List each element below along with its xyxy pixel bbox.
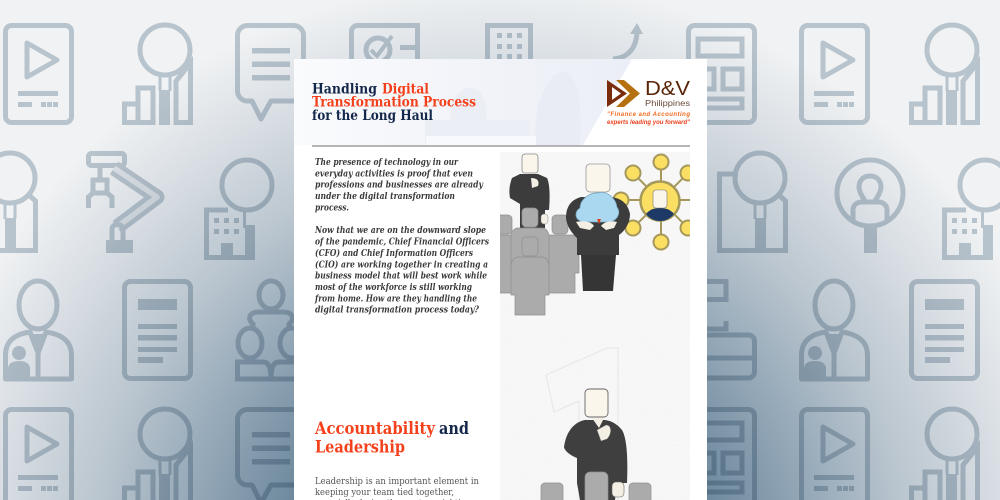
icon: person in magnifier — [837, 160, 903, 253]
intro text: from home. How are they handling the — [314, 294, 477, 304]
intro text: most of the workforce is still working — [315, 283, 472, 293]
intro text: professions and businesses are already — [315, 181, 484, 191]
icon: cash register — [688, 282, 754, 378]
icon: check document — [352, 26, 420, 83]
number one outline — [546, 348, 618, 500]
leadership body text: keeping your team tied together, — [315, 488, 454, 498]
intro text: of the pandemic, Chief Financial Officers — [315, 237, 489, 247]
man with hand on heart, front — [564, 389, 627, 500]
logo: D&V Philippines: D&V — [645, 78, 691, 100]
icon: magnifier chart bottom — [124, 409, 190, 500]
icon: magnifier chart — [124, 25, 190, 125]
illustration: leaders, team and digital network — [500, 154, 690, 500]
title: Transformation Process — [312, 95, 476, 111]
intro text: business model that will best work while — [315, 272, 487, 282]
logo: D&V Philippines: "Finance and Accounting — [607, 112, 690, 118]
icon: person in suit — [6, 281, 72, 379]
logo: D&V Philippines: experts leading you forward" — [607, 120, 690, 126]
intro text — [314, 158, 489, 316]
header divider — [312, 145, 690, 147]
icon: text document right — [912, 282, 978, 378]
icon: video document — [6, 26, 72, 122]
logo: D&V Philippines — [607, 78, 691, 126]
man with hand on heart, rear — [509, 154, 550, 228]
icon: growth arrow — [613, 23, 643, 59]
intro text: digital transformation process today? — [315, 306, 480, 316]
intro text: process. — [315, 203, 349, 213]
icon: group of people — [238, 281, 305, 379]
icon: layout document — [688, 26, 754, 122]
icon: magnifier chart bottom right — [912, 409, 978, 500]
icon: video document bottom — [6, 410, 72, 500]
icon: person in suit right — [802, 281, 868, 379]
grey audience heads — [541, 472, 651, 500]
icon: robot arm — [88, 154, 157, 253]
icon: magnifier building right — [944, 160, 1000, 260]
icon: magnifier document — [720, 153, 786, 253]
panel: white document page — [294, 59, 707, 500]
icon: building — [488, 26, 530, 122]
title: Handling — [312, 82, 377, 98]
icon: chat bubble — [237, 25, 304, 119]
intro text: The presence of technology in our — [315, 158, 459, 168]
icon: magnifier building — [206, 160, 272, 260]
leadership body text — [315, 477, 479, 500]
illustration panel background — [500, 152, 690, 500]
man holding cloud — [566, 164, 630, 291]
intro text: (CIO) are working together in creating a — [315, 259, 488, 270]
icon: magnifier chart right — [912, 25, 978, 125]
title: Digital — [382, 82, 429, 98]
leadership body text: Leadership is an important element in — [315, 477, 479, 487]
heading: accountability and leadership: and — [439, 419, 469, 438]
intro text: everyday activities is proof that even — [315, 169, 473, 179]
intro text: (CFO) and Chief Information Officers — [315, 248, 473, 259]
network diagram — [614, 154, 700, 250]
icon: magnifier document left — [0, 153, 36, 253]
icon: layout document bottom — [688, 410, 754, 500]
intro text: under the digital transformation — [315, 192, 455, 202]
title: for the Long Haul — [312, 108, 433, 124]
heading: accountability and leadership: Accountability — [314, 419, 435, 438]
logo: D&V Philippines: Philippines — [645, 98, 690, 108]
header background photo — [294, 59, 632, 145]
heading: accountability and leadership: Leadership — [315, 438, 405, 457]
grey team — [500, 208, 580, 316]
icon: chat bubble bottom — [237, 409, 304, 500]
intro text: Now that we are on the downward slope — [314, 226, 486, 236]
icon: video document bottom right — [802, 410, 868, 500]
icon: text document — [124, 282, 190, 378]
icon: video document right — [802, 26, 868, 122]
